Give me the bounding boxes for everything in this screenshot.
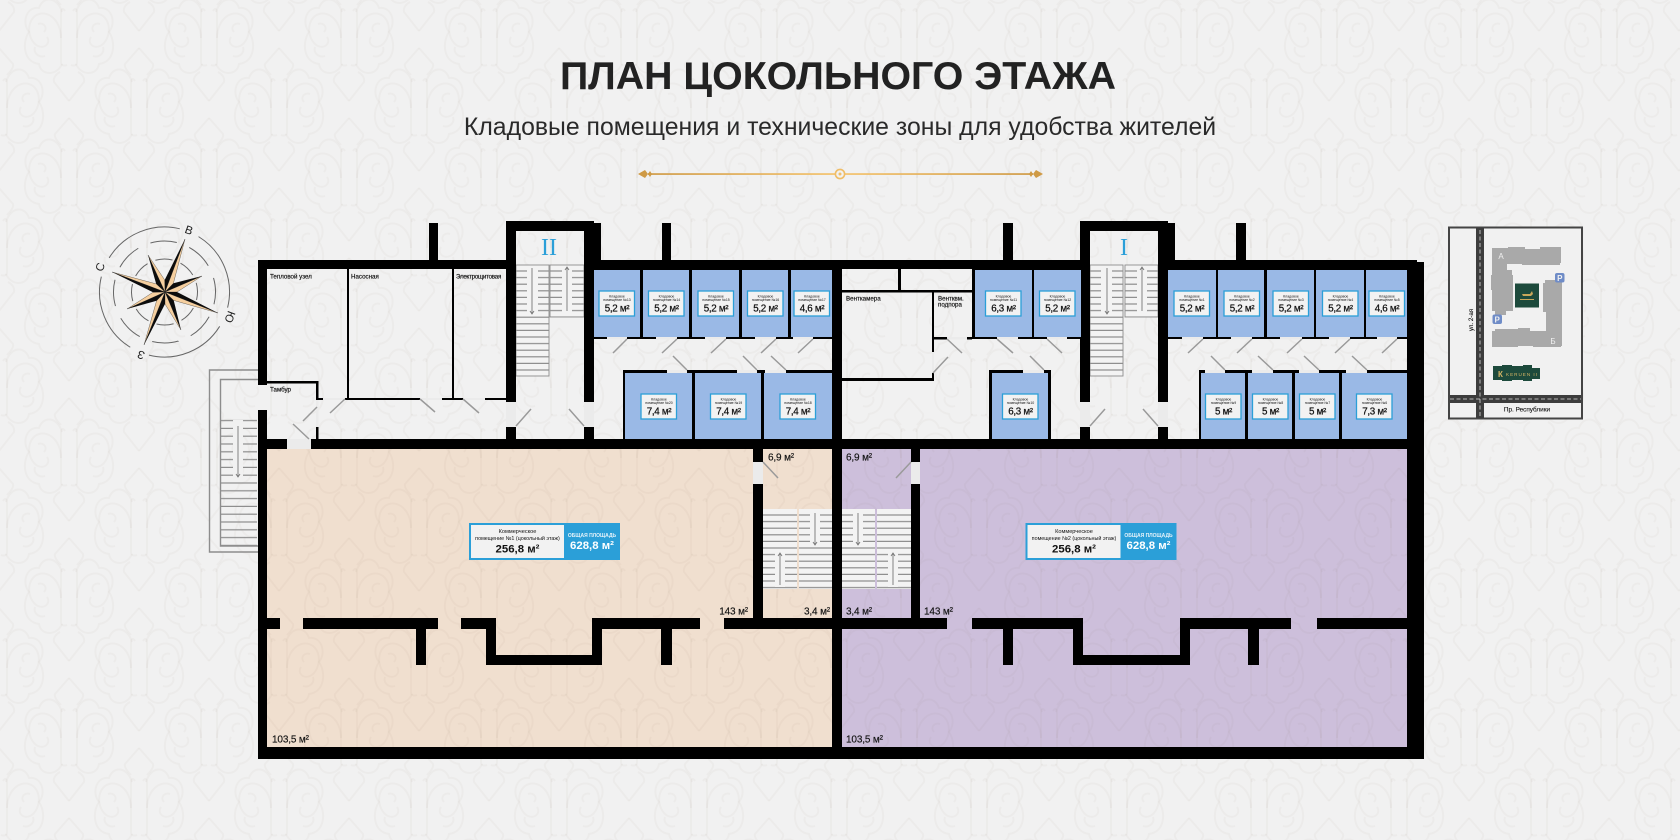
storage label: left top row: 5,2 м² xyxy=(753,304,779,314)
storage label: right lower row: Кладовое xyxy=(1263,398,1278,402)
area labels: commercial premises 1: 3,4 м² xyxy=(804,606,831,618)
callout: commercial premises 1: помещение №1 (цокольный этаж) xyxy=(475,535,560,542)
storage label: left top row: Кладовое xyxy=(758,294,773,298)
stairwell I flights xyxy=(1090,265,1158,376)
walls xyxy=(258,221,1424,759)
storage label: middle block: Кладовое xyxy=(1013,398,1028,402)
technical room names xyxy=(270,274,964,394)
storage label: right lower row: помещение №8 xyxy=(1258,401,1283,405)
storage label: right top row: помещение №3 xyxy=(1278,298,1304,302)
area labels: commercial premises 2 xyxy=(846,452,954,746)
compass rose: З xyxy=(136,347,147,361)
area labels: commercial premises 2: 6,9 м² xyxy=(846,452,873,464)
storage label: right top row: помещение №4 xyxy=(1328,298,1353,302)
storage label: right lower row: Кладовое xyxy=(1216,398,1231,402)
storage label: left top row: Кладовое xyxy=(609,294,625,298)
site location map: P xyxy=(1495,316,1501,324)
storage label: left lower row: Кладовое xyxy=(651,398,667,402)
area labels: commercial premises 1: 143 м² xyxy=(719,606,749,618)
storage label: right top row: Кладовое xyxy=(1283,294,1299,298)
storage label: right top row: 5,2 м² xyxy=(1230,304,1255,314)
storage label: right top row: 4,6 м² xyxy=(1375,304,1400,314)
site location map: P xyxy=(1557,274,1563,283)
callout: commercial premises 2: 628,8 м² xyxy=(1127,540,1171,552)
gold divider xyxy=(638,169,1043,179)
storage label: middle block: 5,2 м² xyxy=(1045,304,1071,314)
storage label: right lower row: Кладовое xyxy=(1310,398,1325,402)
storage label: right lower row xyxy=(1206,394,1392,419)
area labels: commercial premises 2: 3,4 м² xyxy=(846,606,873,618)
stairwell number I: I xyxy=(1120,235,1128,261)
storage label: left top row xyxy=(599,291,830,316)
callout: commercial premises 1: ОБЩАЯ ПЛОЩАДЬ xyxy=(568,533,617,539)
storage label: right top row: Кладовое xyxy=(1333,294,1348,298)
door leaves xyxy=(293,339,1397,478)
site location map: Б xyxy=(1550,337,1556,346)
door openings xyxy=(287,337,1397,484)
site location map: ул. 2-ая xyxy=(1468,309,1475,331)
storage label: left lower row: помещение №20 xyxy=(645,401,673,405)
storage label: middle block: помещение №10 xyxy=(1007,401,1034,405)
callout: commercial premises 2: Коммерческое xyxy=(1055,529,1093,535)
storage label: left lower row: 7,4 м² xyxy=(647,406,672,418)
technical room names: Тепловой узел xyxy=(270,274,312,280)
storage label: left top row: помещение №15 xyxy=(702,298,730,302)
storage label: right lower row: помещение №9 xyxy=(1211,401,1236,405)
storage label: right top row: 5,2 м² xyxy=(1279,304,1304,314)
technical room names: Электрощитовая xyxy=(456,274,501,280)
storage label: right lower row: 5 м² xyxy=(1262,406,1280,418)
site location map: Пр. Республики xyxy=(1504,406,1551,414)
site location map: А xyxy=(1498,252,1504,261)
storage label: right lower row: Кладовое xyxy=(1367,398,1382,402)
site location map: KERUEN II xyxy=(1506,372,1538,377)
lobby stairs floor 1 xyxy=(763,509,832,589)
storage label: middle block: Кладовое xyxy=(1050,294,1065,298)
stairwell II flights xyxy=(516,265,584,376)
storage label: right lower row: 5 м² xyxy=(1215,406,1233,418)
callout: commercial premises 1: 256,8 м² xyxy=(496,544,540,556)
area labels: commercial premises 2: 103,5 м² xyxy=(846,734,884,746)
area labels: commercial premises 1 xyxy=(272,452,831,746)
stairwell number II: II xyxy=(541,235,557,261)
callout: commercial premises 2: 256,8 м² xyxy=(1052,544,1096,556)
storage label: right lower row: 5 м² xyxy=(1309,406,1327,418)
technical room names: Вентквм. xyxy=(938,296,964,302)
callout: commercial premises 2: ОБЩАЯ ПЛОЩАДЬ xyxy=(1124,533,1173,539)
storage label: left top row: Кладовое xyxy=(708,294,724,298)
storage label: right top row: Кладовое xyxy=(1234,294,1250,298)
area labels: commercial premises 2: 143 м² xyxy=(924,606,954,618)
storage label: left lower row xyxy=(641,394,816,419)
commercial premises floor 1 xyxy=(267,449,833,748)
storage label: right lower row: помещение №6 xyxy=(1362,401,1387,405)
storage label: left lower row: Кладовое xyxy=(790,398,806,402)
storage label: left top row: помещение №16 xyxy=(752,298,779,302)
storage label: left lower row: Кладовое xyxy=(721,398,736,402)
technical room names: подпора xyxy=(938,302,962,308)
storage label: left lower row: 7,4 м² xyxy=(716,406,742,418)
site location map: К xyxy=(1498,370,1503,379)
storage label: right top row: помещение №1 xyxy=(1179,298,1205,302)
storage label: middle block: 6,3 м² xyxy=(991,304,1017,314)
storage label: right lower row: 7,3 м² xyxy=(1362,406,1388,418)
storage label: right top row: 5,2 м² xyxy=(1180,304,1205,314)
storage label: left top row: 5,2 м² xyxy=(605,304,630,314)
lobby stairs floor 2 xyxy=(842,509,911,589)
storage label: left lower row: помещение №19 xyxy=(715,401,742,405)
callout: commercial premises 1: Коммерческое xyxy=(499,529,536,535)
compass rose xyxy=(75,202,254,382)
callout: commercial premises 2 xyxy=(1026,523,1176,560)
area labels: commercial premises 1: 6,9 м² xyxy=(768,452,795,464)
technical room names: Насосная xyxy=(351,274,379,280)
compass rose: С xyxy=(94,261,108,273)
storage label: left top row: 5,2 м² xyxy=(704,304,729,314)
storage label: right top row: помещение №2 xyxy=(1229,298,1255,302)
storage label: left top row: помещение №17 xyxy=(798,298,826,302)
storage label: right top row: Кладовое xyxy=(1379,294,1395,298)
site location map xyxy=(1449,228,1582,418)
storage label: middle block xyxy=(986,291,1075,419)
technical room names: Тамбур xyxy=(270,386,292,394)
compass rose: В xyxy=(183,224,195,238)
storage label: right top row xyxy=(1174,291,1404,316)
commercial premises floor 2 xyxy=(841,449,1408,748)
storage label: middle block: помещение №12 xyxy=(1044,298,1071,302)
storage label: right lower row: помещение №7 xyxy=(1305,401,1330,405)
title: ПЛАН ЦОКОЛЬНОГО ЭТАЖА xyxy=(560,54,1116,98)
storage label: left top row: помещение №13 xyxy=(603,298,631,302)
storage label: right top row: 5,2 м² xyxy=(1328,304,1354,314)
storage label: left lower row: помещение №18 xyxy=(784,401,812,405)
area labels: commercial premises 1: 103,5 м² xyxy=(272,734,310,746)
storage label: left top row: 4,6 м² xyxy=(800,304,825,314)
storage label: middle block: Кладовое xyxy=(996,294,1011,298)
storage label: left top row: Кладовое xyxy=(659,294,674,298)
callout: commercial premises 2: помещение №2 (цокольный этаж) xyxy=(1032,535,1117,542)
storage label: left lower row: 7,4 м² xyxy=(786,406,811,418)
storage label: right top row: Кладовое xyxy=(1184,294,1200,298)
callout: commercial premises 1 xyxy=(469,523,620,560)
compass rose: Ю xyxy=(221,309,237,325)
technical room names: Венткамера xyxy=(846,296,881,302)
storage label: left top row: Кладовое xyxy=(804,294,820,298)
storage label: right top row: помещение №5 xyxy=(1374,298,1400,302)
storage label: middle block: помещение №11 xyxy=(990,298,1017,302)
callout: commercial premises 1: 628,8 м² xyxy=(570,540,614,552)
storage label: left top row: 5,2 м² xyxy=(654,304,680,314)
storage label: middle block: 6,3 м² xyxy=(1008,406,1034,418)
storage label: left top row: помещение №14 xyxy=(653,298,680,302)
outdoor entrance stairs xyxy=(210,370,258,552)
storage rooms xyxy=(594,270,1407,439)
subtitle: Кладовые помещения и технические зоны для удобства жителей xyxy=(464,114,1216,141)
